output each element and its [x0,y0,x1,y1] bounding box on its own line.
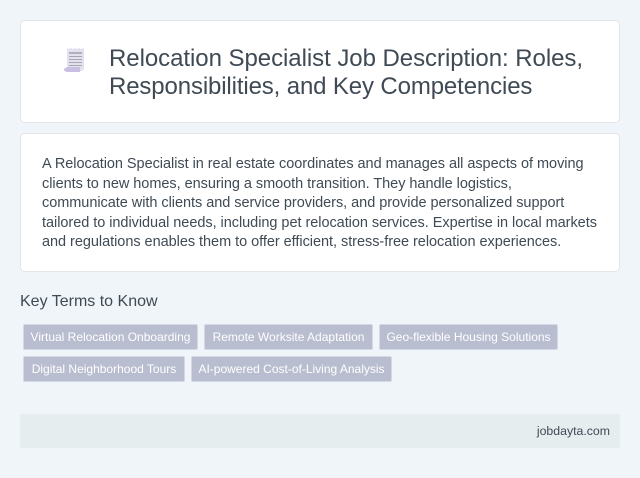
description text: A Relocation Specialist in real estate coordinates and manages all aspects of moving [42,156,584,172]
description text: tailored to individual needs, including pet relocation services. Expertise in local markets [42,214,597,230]
tag: digital neighborhood tours [23,356,185,382]
tag group: key terms [23,324,558,382]
panel: description card [20,133,620,272]
title: Responsibilities, and Key Competencies [109,73,532,100]
tag: ai-powered cost-of-living analysis [191,356,392,382]
tag: remote worksite adaptation [204,324,373,350]
footer bar [20,414,620,448]
tag: geo-flexible housing solutions [379,324,558,350]
tag: remote worksite adaptation: Remote Worksite Adaptation [213,330,364,344]
tag: virtual relocation onboarding [23,324,198,350]
description text: and regulations enables them to offer efficient, stress-free relocation experiences. [42,234,561,250]
tag: ai-powered cost-of-living analysis: AI-powered Cost-of-Living Analysis [198,362,385,376]
panel: title card [20,20,620,123]
tag: digital neighborhood tours: Digital Neighborhood Tours [32,362,176,376]
description text: communicate with clients and service providers, and provide personalized support [42,195,564,211]
heading: key terms: Key Terms to Know [20,293,158,310]
footer source text: jobdayta.com [537,424,610,438]
tag: geo-flexible housing solutions: Geo-flexible Housing Solutions [386,330,551,344]
title: Relocation Specialist Job Description: Roles, [109,45,583,72]
title [109,45,583,100]
icon: document scroll [64,48,84,72]
description text: clients to new homes, ensuring a smooth transition. They handle logistics, [42,176,512,192]
description text [42,156,597,250]
tag: virtual relocation onboarding: Virtual Relocation Onboarding [31,330,190,344]
